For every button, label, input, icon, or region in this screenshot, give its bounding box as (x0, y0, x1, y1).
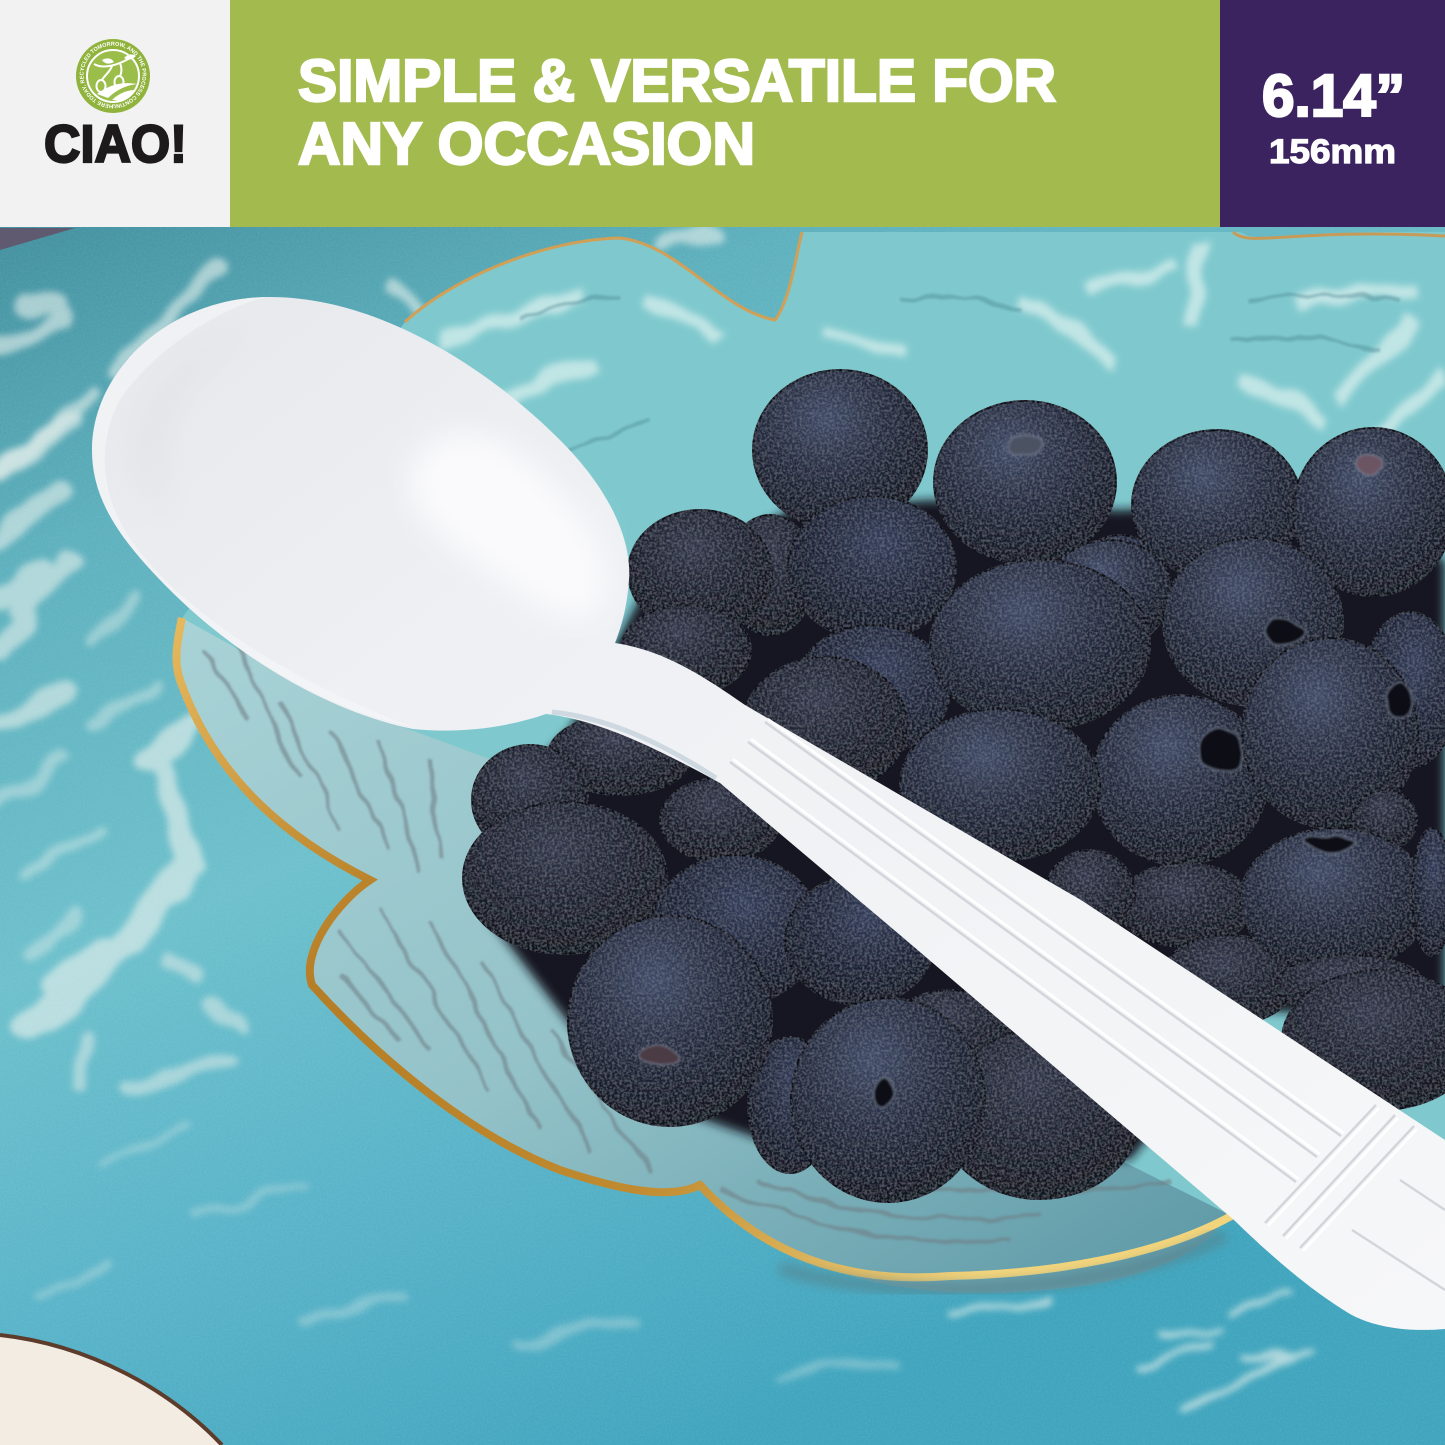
plate at bottom-left corner (0, 1335, 222, 1445)
handle ridges (730, 722, 1445, 1290)
header: logo panel (0, 0, 230, 227)
white spoon (92, 297, 1445, 1330)
blueberries (463, 370, 1445, 1202)
spoon length in millimetres: 156mm (1269, 133, 1396, 171)
glass bowl (176, 232, 1445, 1292)
spoon length in inches: 6.14” (1262, 63, 1405, 129)
icon: CIAO round green seal (76, 39, 150, 113)
header: purple size badge (1220, 0, 1445, 227)
berry calyx details (640, 434, 1413, 1108)
title: ANY OCCASION (298, 111, 755, 177)
header: green title banner (230, 0, 1220, 227)
dark object at top-left edge (0, 228, 75, 250)
berry shadow mass (490, 500, 1445, 1160)
title (298, 48, 1056, 177)
title: SIMPLE & VERSATILE FOR (298, 48, 1056, 114)
logo wordmark: CIAO! (44, 115, 187, 174)
